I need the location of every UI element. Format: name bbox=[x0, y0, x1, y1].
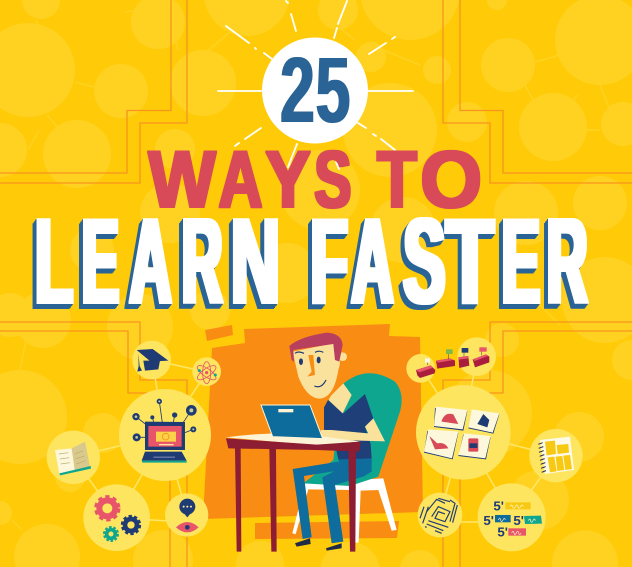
illustration: student at desk bbox=[225, 333, 402, 552]
icon: maze bbox=[418, 493, 462, 537]
neck bbox=[328, 383, 352, 413]
icon: flags and boxes bbox=[406, 337, 496, 383]
icon: video laptop bbox=[119, 389, 211, 481]
icon: graduation cap bbox=[132, 341, 171, 379]
network connectors bbox=[73, 357, 556, 522]
title: ways to: Y bbox=[266, 135, 310, 225]
badge: 25 bbox=[262, 38, 368, 144]
icon: five-minute notes: 5' bbox=[493, 498, 504, 513]
table bbox=[225, 433, 361, 552]
shirt bbox=[324, 394, 373, 459]
title: learn faster: A bbox=[130, 193, 172, 329]
title: learn faster: N bbox=[231, 193, 280, 329]
icon: atom bbox=[192, 357, 221, 386]
badge: 25: 5 bbox=[316, 38, 350, 142]
title: learn faster: F bbox=[310, 193, 348, 329]
title: learn faster: L bbox=[35, 193, 73, 329]
title: ways to: W bbox=[148, 135, 216, 225]
title: learn faster: R bbox=[182, 193, 222, 329]
badge: 25: 2 bbox=[280, 38, 315, 142]
icon: five-minute notes: 5' bbox=[513, 513, 524, 528]
trousers bbox=[293, 457, 372, 543]
title: learn faster: T bbox=[446, 193, 494, 329]
title: learn faster: A bbox=[352, 193, 394, 329]
arm bbox=[321, 418, 385, 441]
shoes bbox=[295, 538, 342, 551]
icon: notebook bbox=[529, 429, 583, 482]
orange backdrop panel bbox=[203, 324, 423, 539]
title: learn faster: E bbox=[502, 193, 540, 329]
head bbox=[289, 333, 347, 399]
title: ways to: A bbox=[218, 135, 262, 225]
title: ways to: O bbox=[420, 135, 482, 225]
icon: five-minute notes: 5' bbox=[483, 513, 494, 528]
title: ways to: S bbox=[314, 135, 351, 225]
sun rays bbox=[218, 1, 413, 169]
laptop bbox=[261, 405, 323, 439]
icon: picture cards bbox=[416, 385, 511, 480]
icon: five-minute notes: 5' bbox=[497, 524, 508, 539]
icon: speech bubble and eye bbox=[165, 493, 208, 537]
chair bbox=[292, 373, 402, 543]
title: learn faster: E bbox=[82, 193, 119, 329]
icon: five-minute notes bbox=[478, 483, 546, 551]
title: ways to: T bbox=[377, 135, 417, 225]
title: learn faster: S bbox=[403, 193, 446, 329]
icon: gears bbox=[83, 484, 150, 551]
icon: open book bbox=[47, 431, 100, 484]
